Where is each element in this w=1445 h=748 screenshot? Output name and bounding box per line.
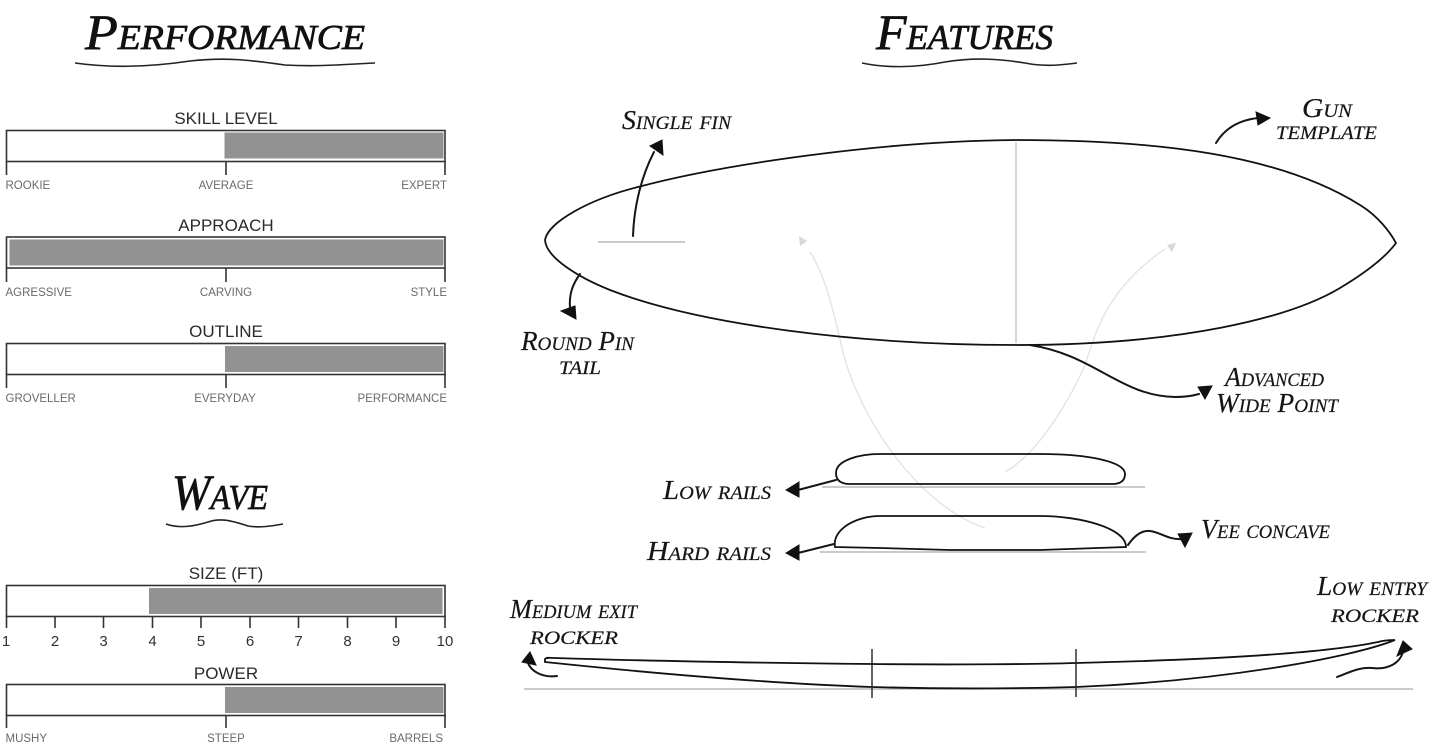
slider: skill level: ROOKIE	[6, 180, 51, 192]
slider: wave size in feet: 10	[437, 633, 453, 650]
slider: wave power	[6, 664, 445, 745]
slider: wave size in feet: 1	[2, 633, 10, 650]
slider: wave size in feet: 7	[294, 633, 303, 650]
slider: wave size in feet: 2	[51, 633, 59, 650]
callout: gun template	[1216, 93, 1377, 145]
callout: low entry rocker: rocker	[1330, 598, 1419, 628]
slider: wave power: MUSHY	[6, 733, 47, 745]
slider: outline	[6, 322, 447, 405]
stringer line	[1015, 142, 1017, 343]
callout: advanced wide point: Wide Point	[1216, 388, 1339, 418]
callout: round pin tail	[520, 274, 635, 380]
callout: advanced wide point: Advanced	[1223, 362, 1324, 392]
callout: single fin: Single fin	[622, 105, 732, 135]
slider: outline: OUTLINE	[189, 322, 263, 341]
callout: gun template: template	[1276, 115, 1377, 145]
slider: wave size in feet: SIZE (FT)	[189, 564, 263, 583]
callout: medium exit rocker: Medium exit	[509, 594, 638, 624]
slider: outline: PERFORMANCE	[358, 393, 447, 405]
callout: low entry rocker: Low entry	[1316, 571, 1429, 601]
slider: wave size in feet: 6	[246, 633, 254, 650]
heading: Performance: Performance	[84, 4, 365, 60]
slider: wave size in feet: 8	[343, 633, 352, 650]
callout: gun template: Gun	[1302, 93, 1353, 123]
slider: wave size in feet: 3	[99, 633, 108, 650]
rail section: low rails: Low rails	[662, 475, 772, 505]
slider: approach	[6, 216, 447, 299]
faint arrows linking the board to the rail sections	[799, 236, 1176, 528]
slider: wave power: STEEP	[207, 733, 245, 745]
rail section: hard rails	[646, 516, 1146, 566]
slider: skill level	[6, 109, 447, 192]
callout: vee concave	[1128, 514, 1330, 547]
rail section: hard rails: Hard rails	[646, 536, 772, 566]
slider: wave size in feet	[2, 564, 453, 650]
callout: medium exit rocker: rocker	[529, 620, 618, 650]
callout: advanced wide point	[1030, 345, 1339, 418]
slider: approach: CARVING	[200, 287, 252, 299]
callout: vee concave: Vee concave	[1201, 514, 1330, 544]
heading: Wave: Wave	[172, 464, 268, 520]
heading: Features: Features	[875, 4, 1053, 60]
callout: medium exit rocker	[509, 594, 638, 676]
slider: outline: GROVELLER	[6, 393, 76, 405]
rail section: low rails	[662, 454, 1145, 505]
callout: low entry rocker	[1316, 571, 1429, 677]
slider: wave size in feet: 5	[197, 633, 205, 650]
slider: wave size in feet: 4	[148, 633, 157, 650]
slider: skill level: SKILL LEVEL	[174, 109, 278, 128]
callout: round pin tail: Round Pin	[520, 326, 635, 356]
slider: outline: EVERYDAY	[194, 393, 256, 405]
callout: single fin	[598, 105, 732, 242]
slider: approach: STYLE	[411, 287, 447, 299]
slider: wave power: POWER	[194, 664, 258, 683]
slider: wave power: BARRELS	[389, 733, 443, 745]
slider: skill level: AVERAGE	[199, 180, 254, 192]
slider: wave size in feet: 9	[392, 633, 400, 650]
surfboard plan outline	[545, 140, 1396, 345]
slider: approach: AGRESSIVE	[6, 287, 72, 299]
slider: approach: APPROACH	[178, 216, 274, 235]
callout: round pin tail: tail	[559, 350, 601, 380]
rocker profile	[524, 640, 1413, 698]
slider: skill level: EXPERT	[401, 180, 447, 192]
